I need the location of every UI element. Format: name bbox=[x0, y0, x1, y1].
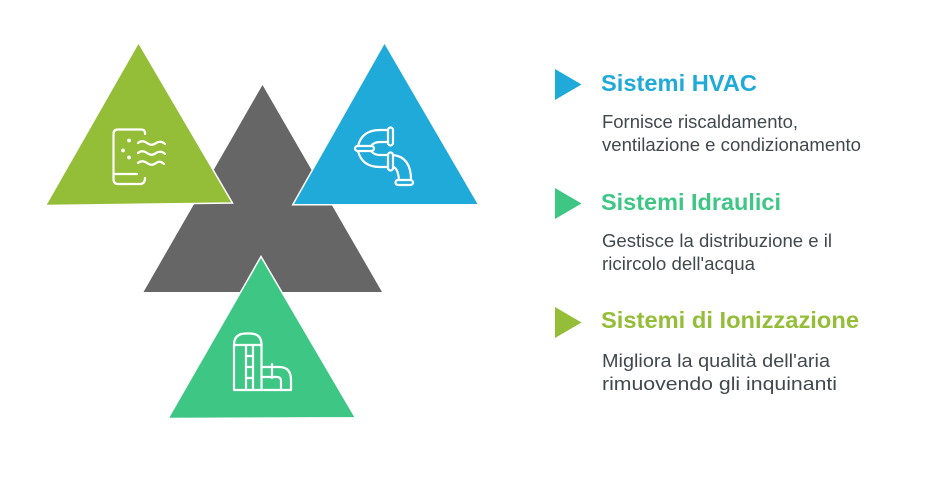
heading: Sistemi di Ionizzazione: Sistemi di Ionizzazione bbox=[601, 307, 859, 333]
heading: Sistemi HVAC: Sistemi HVAC bbox=[601, 70, 757, 96]
panel: blue triangle with pipes icon bbox=[293, 42, 479, 205]
text block: HVAC description: Fornisce riscaldamento, bbox=[602, 112, 798, 132]
arrow: teal bbox=[555, 188, 582, 219]
text block: Idraulici description bbox=[602, 231, 832, 274]
text block: Ionizzazione description bbox=[602, 351, 837, 394]
arrow: green bbox=[555, 307, 582, 338]
panel: teal triangle with tank icon bbox=[168, 256, 356, 418]
icon: silo and pipe bbox=[234, 334, 291, 390]
gray central triangle bbox=[144, 85, 382, 292]
heading: Sistemi Idraulici: Sistemi Idraulici bbox=[601, 189, 781, 215]
arrow: blue bbox=[555, 69, 582, 100]
text block: Idraulici description: Gestisce la distribuzione e il bbox=[602, 231, 832, 251]
text block: HVAC description: ventilazione e condizionamento bbox=[602, 135, 861, 155]
icon: air purifier bbox=[114, 130, 165, 184]
text block: Idraulici description: ricircolo dell'acqua bbox=[602, 254, 756, 274]
text block: HVAC description bbox=[602, 112, 861, 155]
panel: green triangle with air icon bbox=[46, 42, 232, 206]
text block: Ionizzazione description: rimuovendo gli inquinanti bbox=[602, 374, 837, 394]
text block: Ionizzazione description: Migliora la qualità dell'aria bbox=[602, 351, 831, 371]
icon: pipes bbox=[355, 128, 413, 185]
